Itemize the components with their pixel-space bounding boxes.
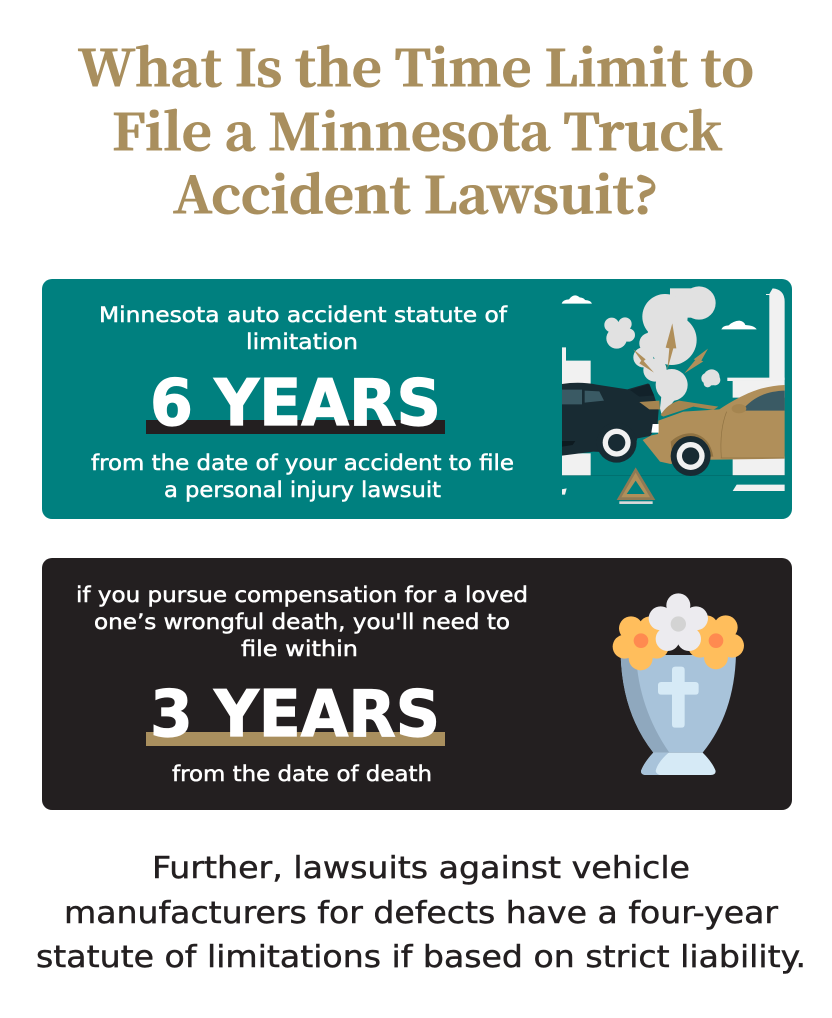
- text: wrongful death intro: one’s wrongful death, you'll need to: [94, 610, 510, 634]
- vase: [621, 655, 736, 753]
- title: File a Minnesota Truck: [112, 93, 722, 165]
- black car: [562, 383, 660, 463]
- ground line: [562, 474, 785, 477]
- icon: memorial vase with flowers: [613, 593, 744, 775]
- white flower: [649, 593, 708, 651]
- sparks: [633, 323, 708, 373]
- icon: car crash illustration: [562, 286, 785, 504]
- orange flower right: [688, 615, 744, 669]
- text: wrongful death intro: [76, 583, 528, 661]
- text: time to file: from the date of your accident to file: [91, 451, 514, 475]
- text: wrongful death intro: file within: [241, 637, 358, 661]
- panel: wrongful death: [42, 558, 792, 810]
- cross: [658, 667, 699, 728]
- text: time to file: [91, 451, 514, 502]
- panel: auto accident statute: [42, 279, 792, 519]
- text: auto accident intro: Minnesota auto accident statute of: [99, 303, 508, 327]
- buildings: [562, 288, 785, 495]
- title: What Is the Time Limit to: [78, 29, 754, 101]
- text: auto accident intro: [99, 303, 508, 354]
- text: auto accident intro: limitation: [246, 330, 358, 354]
- closing text: statute of limitations if based on strict liability.: [36, 940, 806, 975]
- text: wrongful death intro: if you pursue compensation for a loved: [76, 583, 528, 607]
- text: time to file: a personal injury lawsuit: [164, 478, 441, 502]
- smoke: [604, 286, 720, 416]
- title: Accident Lawsuit?: [173, 156, 658, 228]
- title: [78, 29, 754, 228]
- warning triangle: [617, 467, 655, 504]
- closing text: Further, lawsuits against vehicle: [152, 851, 690, 886]
- highlight: 3 years: 3 YEARS: [150, 678, 440, 752]
- closing text: [36, 851, 806, 975]
- clouds: [562, 295, 757, 329]
- highlight: 6 years: 6 YEARS: [150, 367, 441, 441]
- closing text: manufacturers for defects have a four-year: [64, 896, 779, 931]
- orange flower left: [613, 616, 669, 670]
- text: from date of death: from the date of death: [172, 762, 432, 786]
- tan car: [643, 385, 785, 476]
